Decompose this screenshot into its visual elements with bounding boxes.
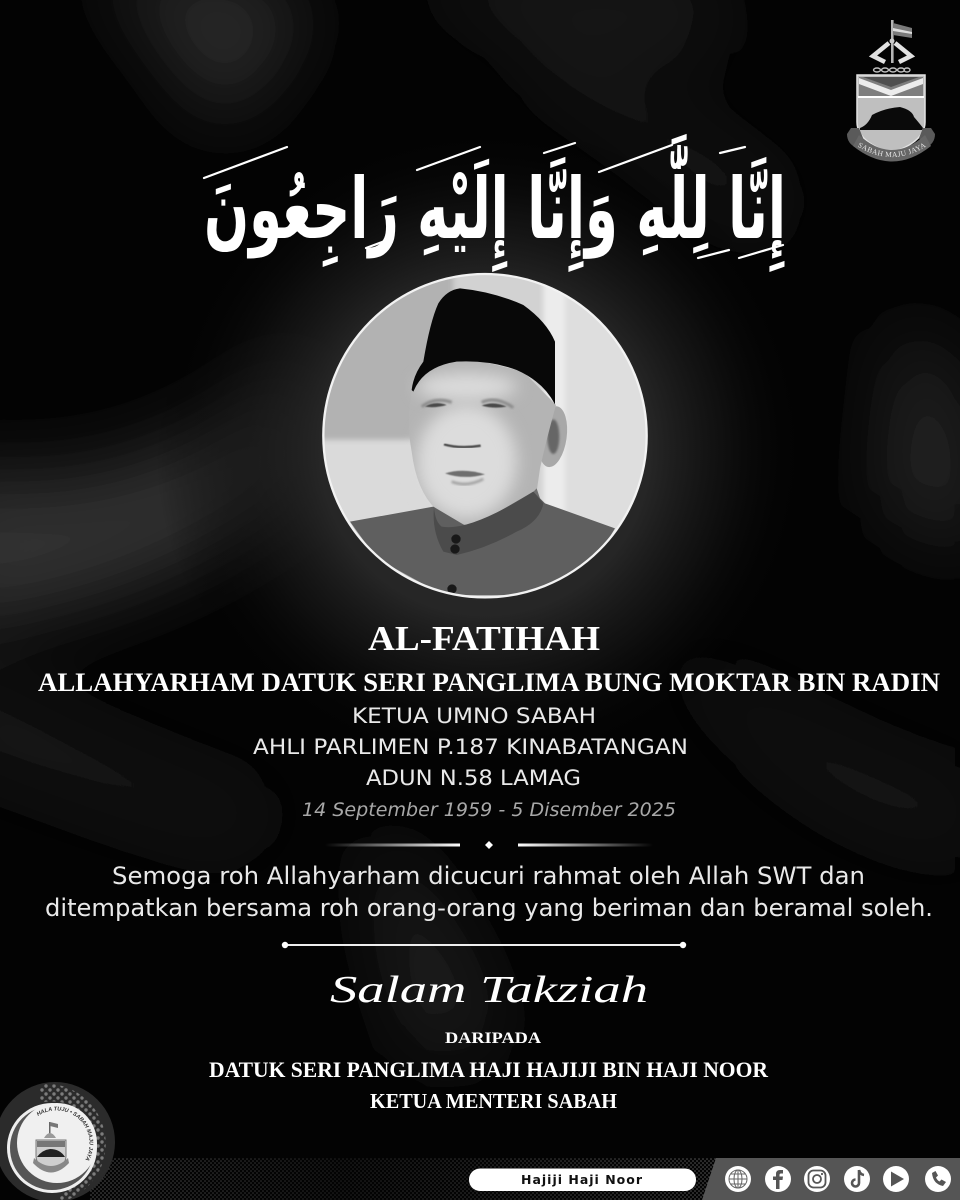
positions held: KETUA UMNO SABAH — [352, 704, 596, 728]
sender block: DARIPADA — [445, 1030, 542, 1047]
condolence message: Semoga roh Allahyarham dicucuri rahmat oleh Allah SWT dan — [112, 862, 865, 890]
script heading: Salam Takziah: Salam Takziah — [330, 969, 648, 1011]
portrait background — [324, 275, 646, 596]
crest ribbon: SABAH MAJU JAYA — [858, 142, 926, 158]
badge dotted sphere — [0, 1082, 115, 1200]
crest flag — [891, 20, 912, 63]
icon: youtube play — [883, 1166, 909, 1192]
lifespan dates: 14 September 1959 - 5 Disember 2025 — [302, 799, 676, 821]
crest wreath — [874, 68, 910, 72]
positions held — [253, 704, 688, 790]
portrait cap — [412, 288, 555, 404]
name pill: Hajiji Haji Noor — [521, 1172, 643, 1187]
badge ring text: HALA TUJU • SABAH MAJU JAYA — [36, 1106, 94, 1160]
badge white disc — [17, 1103, 97, 1183]
portrait photo — [322, 272, 648, 598]
crest arms — [873, 38, 911, 62]
positions held: ADUN N.58 LAMAG — [366, 766, 581, 790]
condolence message: ditempatkan bersama roh orang-orang yang beriman dan beramal soleh. — [45, 894, 933, 922]
icon: phone — [925, 1166, 951, 1192]
crest shield — [857, 75, 925, 153]
sender block: KETUA MENTERI SABAH — [370, 1089, 617, 1113]
divider with diamond — [325, 841, 653, 849]
badge outer ring — [7, 1103, 97, 1193]
heading: Al-Fatihah: AL-FATIHAH — [368, 619, 600, 658]
icon: tiktok — [844, 1166, 870, 1192]
name of the deceased: ALLAHYARHAM DATUK SERI PANGLIMA BUNG MOKTAR BIN RADIN — [38, 668, 940, 697]
Arabic calligraphy: Inna lillahi wa inna ilayhi raji'un — [204, 133, 786, 273]
sender block: DATUK SERI PANGLIMA HAJI HAJIJI BIN HAJI NOOR — [209, 1057, 769, 1082]
positions held: AHLI PARLIMEN P.187 KINABATANGAN — [253, 735, 688, 759]
name pill — [469, 1168, 696, 1191]
portrait face — [409, 360, 571, 533]
crest: Sabah state coat of arms — [847, 20, 935, 162]
footer grey panel — [702, 1158, 960, 1200]
badge crescent — [10, 1106, 94, 1190]
sender block — [209, 1030, 769, 1113]
badge mini crest — [33, 1122, 69, 1172]
crest ribbon — [847, 128, 935, 162]
icon: instagram — [804, 1166, 830, 1192]
logo: Hala Tuju badge — [0, 1082, 115, 1200]
divider with end dots — [282, 942, 686, 948]
portrait ring — [323, 274, 647, 597]
icon: facebook — [765, 1166, 791, 1192]
footer dotted band — [90, 1158, 720, 1200]
condolence message — [45, 862, 933, 922]
portrait shirt — [350, 492, 615, 595]
icon: website globe — [725, 1166, 751, 1192]
